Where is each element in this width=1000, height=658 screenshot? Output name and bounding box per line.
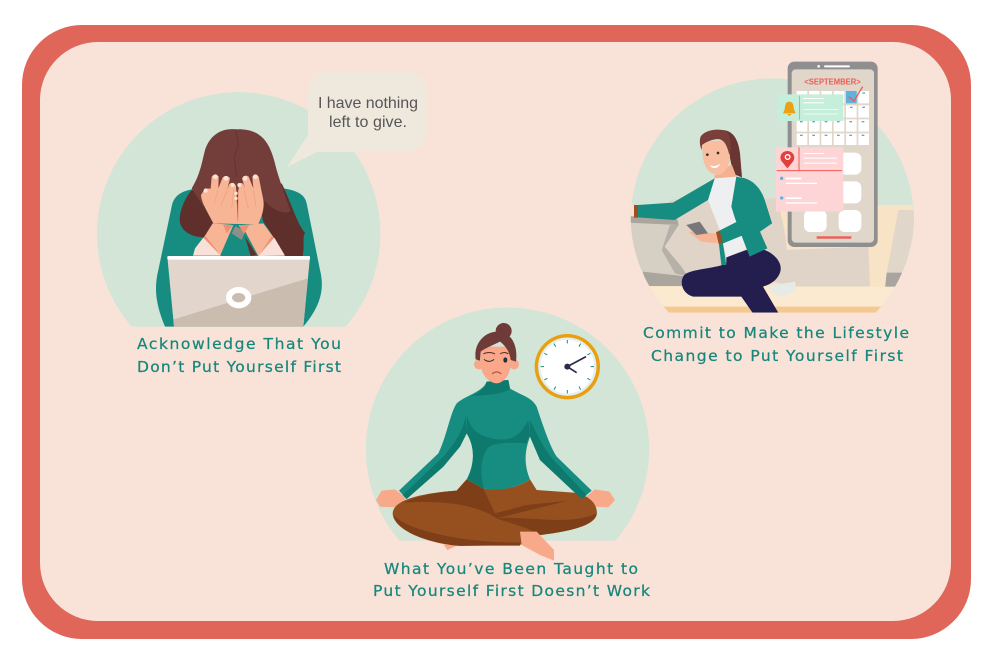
clock hands <box>567 357 586 373</box>
heading: acknowledge: Don’t Put Yourself First <box>137 358 341 376</box>
reminder text lines <box>803 98 838 114</box>
speech bubble <box>287 71 427 167</box>
turtleneck top <box>399 380 592 499</box>
wrist shadow <box>223 225 249 234</box>
clock face <box>539 339 595 395</box>
left hand <box>201 175 238 224</box>
jacket hem strip <box>719 242 726 265</box>
face <box>481 347 511 383</box>
reminder divider <box>799 96 800 120</box>
laptop logo <box>229 290 248 305</box>
clipped room scene <box>630 78 914 312</box>
eyebrows <box>483 352 508 354</box>
fingernails <box>204 174 258 200</box>
watch <box>232 226 245 240</box>
clock ticks <box>541 340 594 393</box>
check mark <box>849 87 863 101</box>
lower hair right <box>257 183 305 256</box>
cuff shadows <box>203 236 274 256</box>
neck <box>714 165 737 185</box>
bubble text: I have nothing <box>318 95 418 112</box>
location card <box>776 147 843 212</box>
hair <box>475 332 516 362</box>
lower hair left <box>180 190 223 237</box>
eyes <box>706 152 719 156</box>
foot <box>520 532 554 561</box>
icon: bell <box>783 102 796 116</box>
mouth <box>492 372 501 374</box>
illustration: woman covering face at laptop <box>97 92 380 327</box>
shoe <box>768 282 797 297</box>
outstretched sleeve <box>638 178 715 220</box>
pillow bottom shade <box>643 272 688 286</box>
pin centre <box>785 155 790 159</box>
phone screen <box>792 69 874 243</box>
hair strand centre <box>245 237 257 256</box>
phone in hand <box>686 222 708 235</box>
legs and shoe <box>682 250 797 313</box>
forearm <box>717 200 772 244</box>
grey pillow <box>631 222 684 276</box>
closed eye <box>484 359 494 361</box>
heading: taught: What You’ve Been Taught to <box>384 560 638 578</box>
heading: commit: Change to Put Yourself First <box>651 347 903 365</box>
left forearm <box>203 223 233 256</box>
reminder card background <box>777 94 843 121</box>
cream sofa body <box>631 205 914 287</box>
location card background <box>776 147 843 212</box>
jacket <box>156 188 322 327</box>
torso shading <box>467 415 530 488</box>
heading: commit: Commit to Make the Lifestyle <box>643 324 909 342</box>
panel: acknowledge <box>97 71 427 376</box>
phone home bar <box>817 236 851 239</box>
left toes <box>443 544 457 550</box>
green circle background <box>630 78 914 274</box>
green circle background <box>97 92 380 327</box>
pillow top shade <box>628 216 679 225</box>
hair parting <box>234 129 238 177</box>
location dividers <box>777 147 842 171</box>
left cuff <box>634 205 638 218</box>
illustration: meditating woman with clock <box>366 308 649 561</box>
open eye <box>503 357 507 363</box>
location bullets <box>780 177 783 200</box>
jacket cuff <box>716 231 723 244</box>
illustration: woman with phone calendar <box>620 62 920 317</box>
green circle background <box>366 308 649 541</box>
floor edge <box>664 306 881 312</box>
upper hair <box>192 129 291 212</box>
phone body <box>788 62 878 247</box>
reminder card <box>777 94 843 121</box>
hand left <box>376 489 407 507</box>
calendar dates <box>800 92 865 136</box>
calendar grid <box>797 91 869 145</box>
hair bun <box>496 323 512 339</box>
panel: commit <box>620 62 920 365</box>
laptop top edge <box>167 256 310 260</box>
laptop shaded section <box>174 278 308 327</box>
jacket front <box>731 177 772 257</box>
laptop lid <box>167 257 310 327</box>
right sofa leg <box>885 272 902 288</box>
trousers <box>682 250 781 313</box>
month label: <SEPTEMBER> <box>804 77 861 86</box>
panel: taught <box>366 308 650 600</box>
ponytail <box>722 130 742 177</box>
floor <box>650 286 895 306</box>
right hand <box>238 175 264 224</box>
ears <box>474 359 519 369</box>
right forearm <box>242 223 274 256</box>
hand right <box>584 489 615 507</box>
heading: taught: Put Yourself First Doesn’t Work <box>373 582 650 600</box>
bubble text: left to give. <box>329 114 407 131</box>
leg shading <box>393 479 597 546</box>
top hair <box>700 130 731 155</box>
smile <box>710 164 720 168</box>
bubble shape <box>287 71 427 167</box>
arm shading <box>403 415 587 499</box>
finger creases <box>214 188 256 220</box>
phone speaker <box>817 65 850 68</box>
app buttons <box>804 153 861 232</box>
right sofa arm <box>887 210 914 273</box>
clock <box>535 334 600 399</box>
woman sitting <box>634 130 797 313</box>
resting hand <box>688 232 718 243</box>
collar shading <box>472 380 510 396</box>
heading: acknowledge: Acknowledge That You <box>137 335 341 353</box>
clock rim <box>535 334 600 399</box>
shirt cuffs <box>193 238 285 256</box>
beige cushion <box>653 198 870 287</box>
white top <box>708 177 746 257</box>
icon: map pin <box>781 151 794 168</box>
legs <box>393 479 597 546</box>
head <box>702 140 730 175</box>
location text lines <box>786 153 837 204</box>
pillow fold shade <box>662 225 688 277</box>
clock centre <box>564 364 570 370</box>
